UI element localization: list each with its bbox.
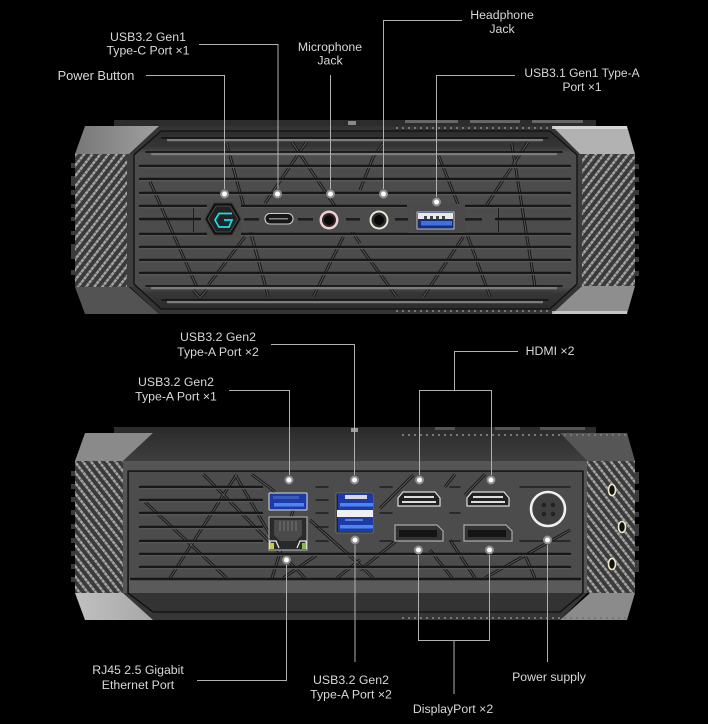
label: RJ45: RJ45 2.5 Gigabit: [92, 663, 184, 677]
chassis band: [123, 461, 587, 593]
USB-A port: [417, 212, 454, 229]
label: RJ45: Ethernet Port: [102, 678, 175, 692]
chassis top: [123, 433, 587, 461]
leader: USB3.2 x2 bottom: [354, 545, 356, 662]
corner caps: [75, 126, 635, 314]
label: power supply: Power supply: [512, 670, 587, 684]
side jacks: [608, 484, 626, 570]
device: front panel: [71, 120, 639, 314]
dual USB-A port: [336, 493, 373, 533]
power button: [205, 203, 241, 235]
leader: USB-C: [199, 44, 278, 189]
DisplayPort ports: [395, 525, 512, 541]
label: USB3.2 x2 bottom: Type-A Port ×2: [310, 688, 392, 702]
port strip: [193, 201, 499, 238]
recessed panel: [128, 471, 583, 612]
leader: microphone: [330, 75, 332, 189]
textured trim: [402, 435, 627, 618]
label: USB3.2 x2 top: USB3.2 Gen2: [180, 330, 256, 344]
leader: USB3.2 x2 top: [271, 344, 354, 475]
chassis: [129, 126, 582, 314]
leader: HDMI: [420, 352, 518, 475]
leader: RJ45: [197, 565, 286, 680]
label: USB-C: USB3.2 Gen1: [110, 30, 186, 44]
HDMI ports: [398, 492, 509, 506]
label: USB3.1: USB3.1 Gen1 Type-A: [524, 66, 640, 80]
textured trim: [396, 128, 552, 311]
label: USB-C: Type-C Port ×1: [106, 44, 190, 58]
rear top strip: [114, 120, 596, 127]
label: USB3.2 x2 top: Type-A Port ×2: [177, 345, 259, 359]
leader: USB3.1: [436, 76, 515, 197]
label: headphone: Headphone: [470, 8, 534, 22]
rear top strip: [114, 427, 596, 433]
USB-C port: [265, 214, 293, 224]
label: microphone: Microphone: [298, 40, 362, 54]
chassis bottom: [123, 593, 587, 620]
carbon side panels: [75, 154, 635, 287]
label: USB3.1: Port ×1: [562, 80, 602, 94]
label: USB3.2 x1: USB3.2 Gen2: [138, 375, 214, 389]
grille ribs: [131, 487, 580, 579]
grille ribs: [140, 138, 570, 302]
label: USB3.2 x1: Type-A Port ×1: [135, 390, 217, 404]
label: headphone: Jack: [489, 22, 515, 36]
microphone jack: [320, 210, 338, 230]
grille lattice: [145, 474, 570, 578]
side fins: [71, 163, 639, 276]
leader: power supply: [546, 545, 548, 662]
label: microphone: Jack: [317, 54, 343, 68]
corner caps: [75, 433, 635, 620]
leader: USB3.2 x1: [229, 390, 290, 475]
label: USB3.2 x2 bottom: USB3.2 Gen2: [313, 673, 389, 687]
RJ45 port: [269, 517, 307, 550]
grille panel: [134, 131, 577, 309]
leader: power button: [146, 76, 224, 189]
label: HDMI: HDMI ×2: [526, 344, 575, 358]
device: rear panel: [71, 427, 639, 620]
leader: headphone: [384, 20, 462, 189]
label: power button: Power Button: [58, 68, 134, 83]
label: DisplayPort: DisplayPort ×2: [413, 702, 493, 716]
USB-A port: [269, 493, 307, 510]
callout dots: [221, 190, 551, 564]
leader: DisplayPort: [418, 555, 490, 694]
headphone jack: [370, 210, 388, 230]
grille lattice: [150, 142, 535, 298]
side fins: [71, 471, 639, 582]
carbon side panels: [75, 461, 635, 593]
power connector: [531, 492, 565, 526]
